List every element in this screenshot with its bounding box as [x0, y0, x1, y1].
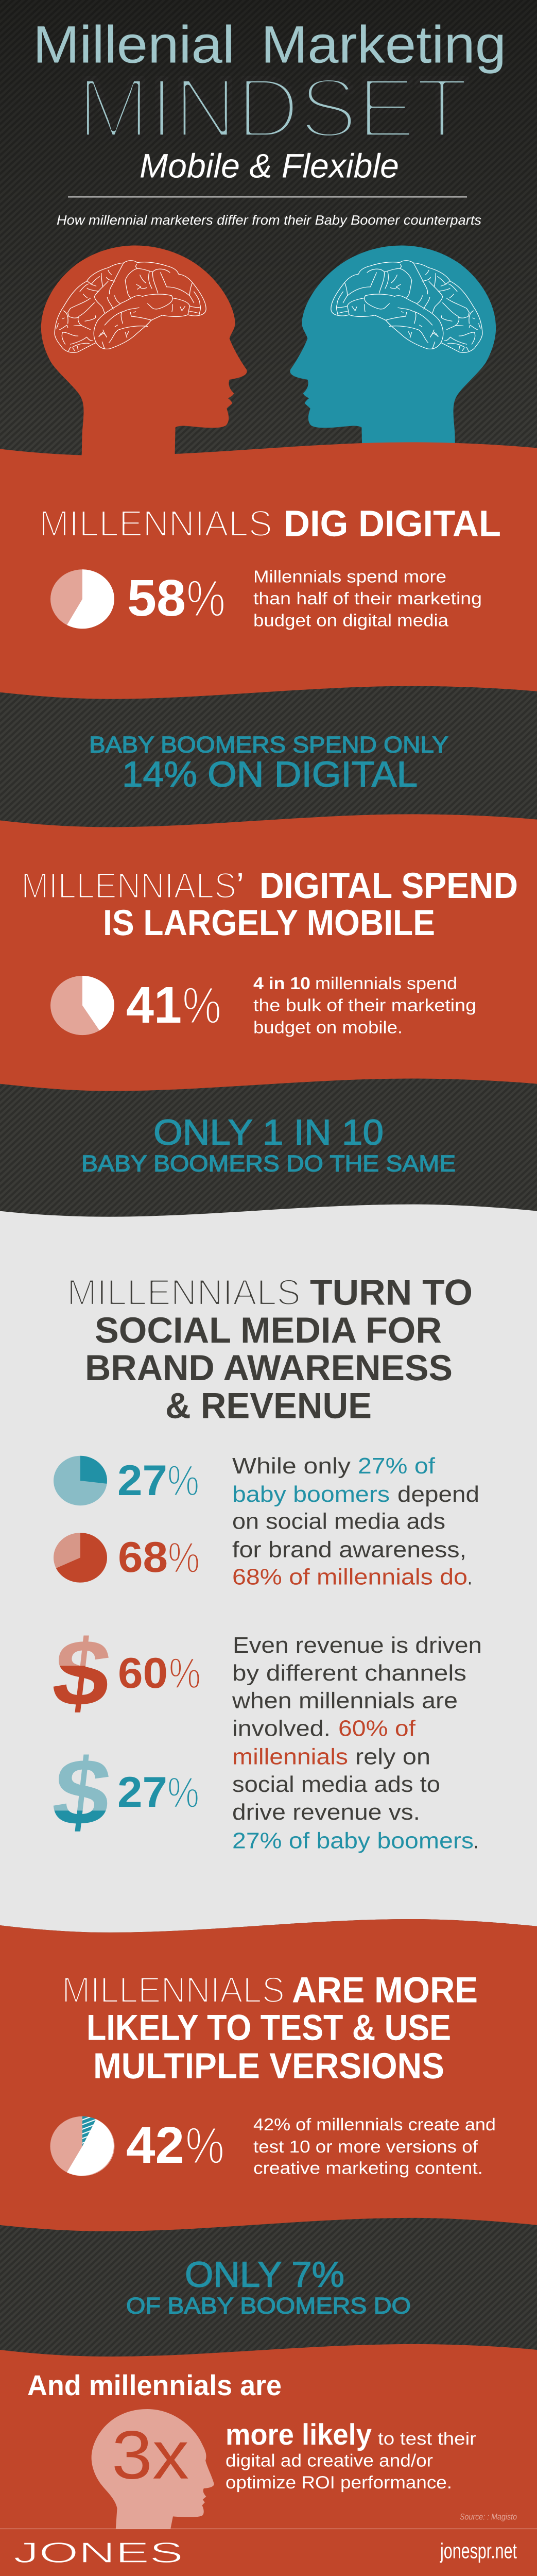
heading: MILLENNIALS: [21, 866, 236, 906]
text block: budget on mobile.: [253, 1018, 403, 1037]
text block: revenue: .: [474, 1828, 478, 1853]
text block: than half of their marketing: [253, 588, 482, 608]
text block: test 10 or more versions of: [253, 2137, 478, 2156]
callout: only 7% of baby boomers do: [126, 2254, 411, 2319]
panel: digital spend is largely mobile: [0, 814, 537, 1091]
icon: dollar 60%: [54, 1635, 109, 1713]
text block: brand awareness: 68% of millennials do: [232, 1564, 467, 1589]
heading: MILLENNIALS: [62, 1970, 285, 2010]
source note: Source: : Magisto: [460, 2512, 517, 2521]
heading: MULTIPLE VERSIONS: [93, 2046, 444, 2087]
stat: 27%: [117, 1457, 199, 1505]
text block: revenue: social media ads to: [232, 1771, 440, 1797]
callout: baby boomers spend only 14%: BABY BOOMERS SPEND ONLY: [89, 733, 448, 758]
heading: [62, 1970, 478, 2087]
pie chart: 41%: [50, 976, 114, 1035]
text block: Millennials spend more: [253, 567, 446, 586]
text block: [253, 567, 482, 630]
title: MINDSET: MINDSET: [77, 60, 469, 156]
text block: revenue: when millennials are: [232, 1688, 458, 1713]
stat: 68%: 68: [118, 1534, 168, 1582]
icon: dollar 60%: $: [48, 1620, 116, 1725]
title: Millenial Marketing: Millenial: [33, 15, 235, 74]
text block: brand awareness: depend: [397, 1481, 479, 1506]
stat: 60%: 60: [118, 1650, 168, 1697]
stat: 42%: [126, 2116, 224, 2174]
text block: to test their: [378, 2429, 476, 2448]
icon: teal head with brain (baby boomer): [290, 245, 496, 464]
text block: revenue: millennials: [232, 1743, 348, 1769]
stat: 27%: 27: [117, 1457, 167, 1504]
icon: dollar 27%: [54, 1755, 109, 1832]
heading: ARE MORE: [292, 1970, 478, 2010]
text block: revenue: 27% of baby boomers: [232, 1828, 474, 1853]
text block: brand awareness: on social media ads: [232, 1509, 445, 1534]
text block: millennials spend: [315, 973, 457, 993]
stat: 41%: %: [182, 976, 221, 1034]
stat: 68%: [118, 1534, 200, 1582]
text block: digital ad creative and/or: [226, 2451, 433, 2470]
text block: brand awareness: for brand awareness,: [232, 1537, 466, 1562]
stat: 42%: %: [185, 2116, 224, 2174]
text block: brand awareness: While only: [232, 1453, 351, 1478]
stat: 42%: 42: [126, 2116, 184, 2174]
heading: ’: [236, 866, 244, 906]
callout: only 1 in 10: ONLY 1 IN 10: [153, 1112, 384, 1152]
text block: 4 in 10: [253, 973, 310, 993]
icon: pale head with 3x: [92, 2409, 214, 2529]
stat: 60%: %: [169, 1650, 201, 1698]
pie chart: 68% millennials: [54, 1533, 107, 1583]
title: Millenial Marketing: [33, 15, 506, 74]
text block: revenue: rely on: [355, 1743, 430, 1769]
heading: SOCIAL MEDIA FOR: [95, 1310, 442, 1351]
header: [33, 15, 506, 228]
icon: dollar 27%: $: [48, 1739, 116, 1844]
title: Millenial Marketing: Marketing: [261, 15, 506, 74]
pie chart: 27% baby boomers: [54, 1456, 107, 1505]
icon: pale head with 3x: 3x: [112, 2417, 189, 2493]
heading: BRAND AWARENESS: [85, 1348, 453, 1388]
text block: revenue: drive revenue vs.: [232, 1799, 420, 1824]
callout: baby boomers spend only 14%: 14% ON DIGITAL: [122, 754, 418, 794]
text block: brand awareness: .: [467, 1564, 472, 1589]
stat: 27%: [117, 1769, 199, 1817]
text block: revenue: 60% of: [338, 1716, 416, 1741]
heading: [39, 503, 501, 544]
text block: revenue: involved.: [232, 1716, 331, 1741]
callout: baby boomers spend only 14%: [89, 733, 448, 794]
panel: header vignette: [0, 0, 537, 449]
text block: budget on digital media: [253, 611, 449, 630]
text block: brand awareness: [232, 1453, 479, 1589]
callout: only 1 in 10: [81, 1112, 456, 1177]
panel: more likely to test and use multiple versions: [0, 1919, 537, 2231]
panel: millennials dig digital: [0, 442, 537, 699]
text block: more likely: [226, 2418, 372, 2451]
stat: 68%: %: [168, 1534, 200, 1582]
stat: 41%: 41: [126, 976, 182, 1033]
icon: dollar 27%: $: [48, 1739, 116, 1844]
stat: 60%: [118, 1650, 201, 1698]
stat: 58%: [127, 569, 226, 628]
panel: and millennials are 3x more likely: [0, 2344, 537, 2576]
callout: only 7% of baby boomers do: ONLY 7%: [185, 2254, 344, 2294]
heading: MILLENNIALS: [67, 1272, 301, 1313]
heading: [67, 1272, 473, 1426]
pie chart: 42% with hatched 7%: [50, 2116, 114, 2176]
text block: optimize ROI performance.: [226, 2473, 452, 2493]
text block: [226, 2418, 476, 2493]
heading: MILLENNIALS: [39, 503, 272, 544]
text block: creative marketing content.: [253, 2158, 483, 2178]
heading: And millennials are: [27, 2369, 282, 2401]
text block: revenue: Even revenue is driven: [233, 1632, 482, 1657]
heading: DIG DIGITAL: [284, 503, 501, 544]
heading: & REVENUE: [165, 1385, 372, 1426]
panel: social media for brand awareness and revenue: [0, 1205, 537, 1933]
text block: [253, 973, 476, 1037]
text block: the bulk of their marketing: [253, 995, 476, 1015]
stat: 27%: 27: [117, 1769, 167, 1816]
heading: [21, 866, 518, 943]
stat: 58%: 58: [127, 569, 186, 627]
text block: [253, 2114, 496, 2178]
intro line: How millennial marketers differ from their Baby Boomer counterparts: [57, 213, 481, 228]
heading: LIKELY TO TEST & USE: [86, 2008, 451, 2048]
heading: IS LARGELY MOBILE: [103, 903, 435, 943]
logo: JONES: JONES: [13, 2536, 183, 2569]
stat: 41%: [126, 976, 221, 1034]
stat: 27%: %: [167, 1769, 199, 1817]
subtitle: Mobile and Flexible: Mobile & Flexible: [140, 147, 399, 185]
text block: 42% of millennials create and: [253, 2114, 496, 2134]
heading: TURN TO: [310, 1272, 473, 1313]
stat: 58%: %: [186, 569, 226, 628]
text block: revenue: by different channels: [232, 1660, 466, 1685]
pie chart: 58%: [50, 569, 114, 629]
callout: only 7% of baby boomers do: OF BABY BOOMERS DO: [126, 2294, 411, 2319]
callout: only 1 in 10: BABY BOOMERS DO THE SAME: [81, 1151, 456, 1177]
rule: [68, 196, 467, 197]
text block: brand awareness: baby boomers: [232, 1481, 390, 1506]
text block: revenue: [232, 1632, 482, 1853]
stat: 27%: %: [167, 1458, 199, 1505]
text block: brand awareness: 27% of: [358, 1453, 436, 1478]
icon: orange head with brain (millennial): [41, 245, 247, 464]
footer line: [0, 2528, 537, 2530]
icon: dollar 60%: $: [48, 1620, 116, 1725]
